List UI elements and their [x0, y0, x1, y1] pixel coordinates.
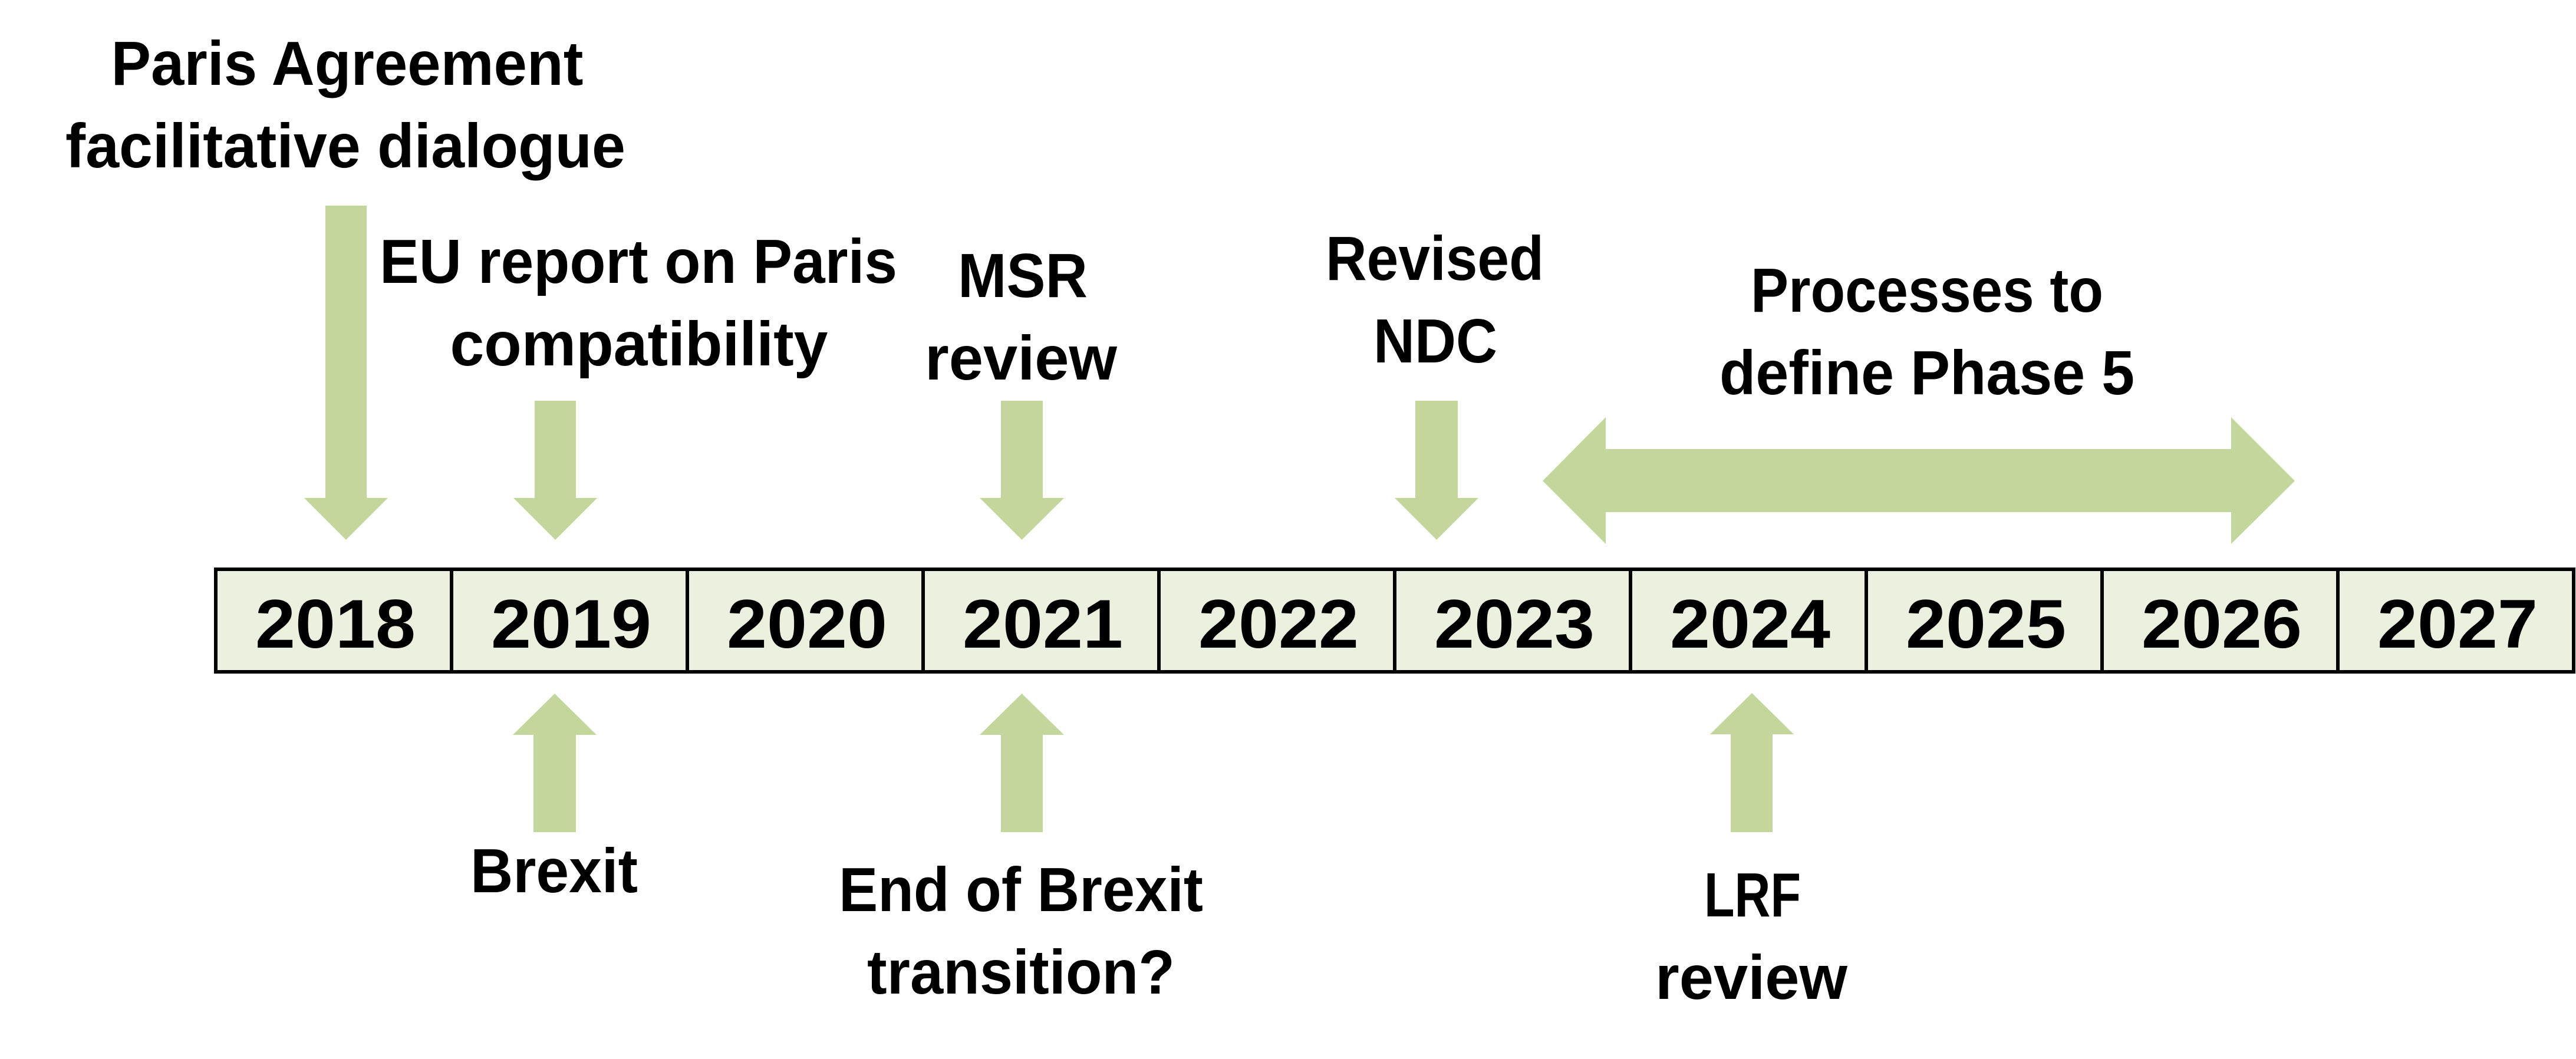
label: LRF review: review [1655, 943, 1848, 1012]
arrow: down to 2018 [304, 206, 388, 540]
arrow: up to 2019 [513, 694, 597, 832]
year 2027: 2027 [2377, 585, 2538, 662]
arrow: down to 2019 [513, 401, 597, 540]
label: Paris Agreement facilitative dialogue: facilitative dialogue [65, 111, 625, 181]
label: Revised NDC: Revised [1326, 224, 1544, 293]
year 2024: 2024 [1670, 585, 1830, 662]
double arrow: 2023 to 2026 [1543, 417, 2295, 544]
arrow: up to 2021 [980, 694, 1064, 832]
year 2026: 2026 [2142, 585, 2302, 662]
label: MSR review: MSR [958, 241, 1088, 311]
label: Brexit: Brexit [470, 836, 638, 906]
label: Processes to define Phase 5 [1719, 256, 2134, 408]
label: LRF review [1655, 860, 1848, 1012]
year 2025: 2025 [1906, 585, 2066, 662]
year 2023: 2023 [1434, 585, 1595, 662]
year 2018: 2018 [255, 585, 416, 662]
label: End of Brexit transition?: transition? [867, 938, 1175, 1007]
timeline bar [214, 568, 2575, 674]
year 2021: 2021 [963, 585, 1123, 662]
label: EU report on Paris compatibility [380, 227, 897, 379]
label: Processes to define Phase 5: Processes to [1751, 256, 2103, 325]
arrow: down to 2021 [980, 401, 1064, 540]
label: Revised NDC: NDC [1373, 306, 1497, 376]
year 2019: 2019 [491, 585, 651, 662]
label: Processes to define Phase 5: define Phase 5 [1719, 338, 2134, 408]
label: Paris Agreement facilitative dialogue: Paris Agreement [111, 29, 584, 98]
label: Revised NDC [1326, 224, 1544, 376]
label: MSR review: review [925, 324, 1118, 393]
label: End of Brexit transition?: End of Brexit [839, 855, 1203, 925]
label: End of Brexit transition? [839, 855, 1203, 1007]
label: MSR review [925, 241, 1118, 393]
label: EU report on Paris compatibility: EU report on Paris [380, 227, 897, 296]
label: LRF review: LRF [1704, 860, 1801, 930]
arrow: down to 2023 [1395, 401, 1478, 540]
label: Paris Agreement facilitative dialogue [65, 29, 625, 181]
year 2022: 2022 [1198, 585, 1359, 662]
arrow: up to 2024 [1710, 693, 1794, 832]
label: EU report on Paris compatibility: compatibility [450, 309, 828, 379]
year 2020: 2020 [727, 585, 887, 662]
